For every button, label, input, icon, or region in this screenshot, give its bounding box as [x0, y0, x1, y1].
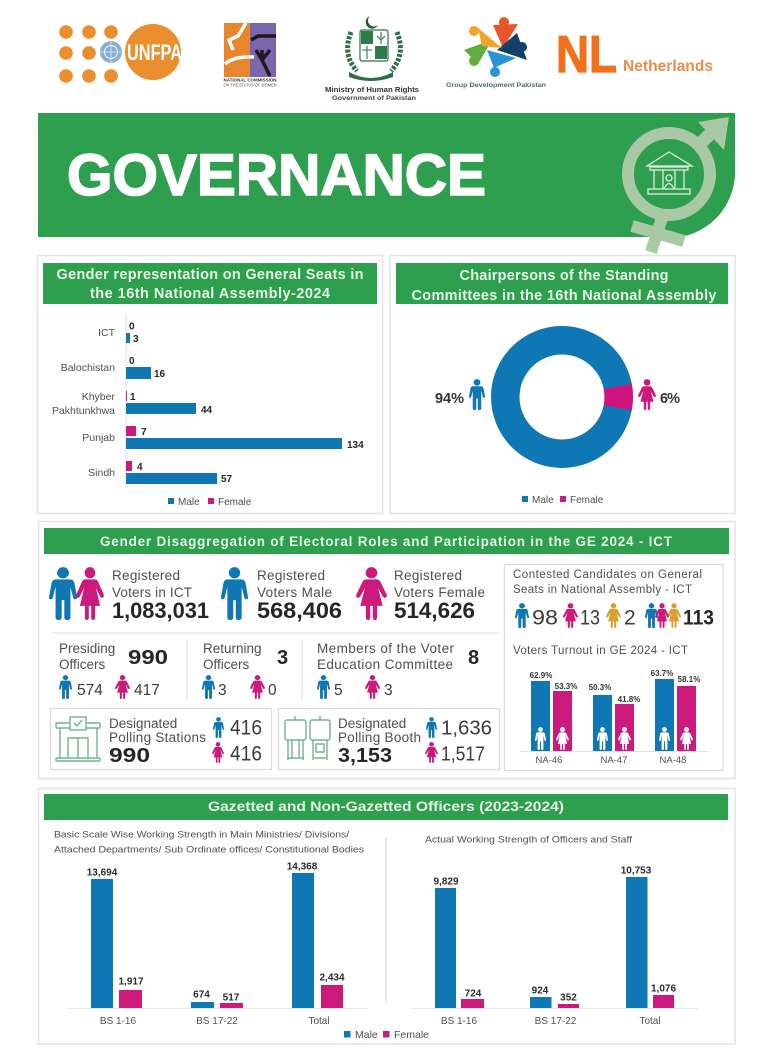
bar chart: basic scale working strength: BS 1-16: [100, 1016, 137, 1027]
icon: gender symbol with parliament building: [628, 117, 729, 252]
stat: presiding officers: Officers: [59, 657, 106, 672]
legend: [168, 497, 252, 508]
stat: candidates by gender: [515, 603, 714, 630]
heading: [44, 794, 728, 820]
bar chart: seats by province: 57: [221, 474, 233, 485]
stat: presiding officers: 990: [128, 647, 168, 669]
heading: Gender representation on General Seats in: [56, 267, 364, 283]
text: right chart title: Actual Working Strength of Officers and Staff: [425, 834, 632, 846]
stat: registered voters in ICT: [49, 567, 209, 623]
bar chart: seats by province: Balochistan: [61, 362, 115, 374]
bar chart: voter turnout: NA-48: [660, 755, 686, 766]
bar chart: actual working strength: 352: [560, 992, 577, 1004]
icon: polling booths: [285, 716, 330, 760]
card: designated polling stations: 416: [230, 742, 262, 766]
bar chart: voter turnout: 53.3%: [555, 682, 577, 691]
bar chart: voter turnout: 58.1%: [678, 675, 700, 684]
logo: National Commission on the Status of Women: [224, 23, 277, 88]
bar chart: voter turnout: [520, 669, 708, 766]
card: designated polling stations: 990: [109, 745, 150, 767]
stat: registered voters in ICT: 1,083,031: [112, 598, 209, 623]
stat: registered voters female: [356, 567, 485, 623]
legend: [522, 495, 604, 506]
bar chart: seats by province: [52, 313, 364, 487]
stat: returning officers: 0: [268, 682, 277, 699]
stat: returning officers: 3: [218, 682, 227, 699]
bar chart: basic scale working strength: 674: [193, 990, 210, 1000]
bar chart: actual working strength: 724: [465, 988, 482, 1000]
callout: male share: 94%: [435, 391, 464, 407]
bar chart: seats by province: 1: [130, 392, 136, 403]
stat: voter education committee: 5: [334, 682, 343, 699]
panel: gender representation on general seats: [38, 256, 382, 514]
stat: voter education committee: 3: [384, 682, 393, 699]
bar chart: voter turnout: 41.8%: [618, 695, 640, 704]
logo: National Commission on the Status of Women: NATIONAL COMMISSION: [224, 78, 277, 84]
heading: [44, 528, 729, 554]
bar chart: basic scale working strength: 517: [223, 992, 240, 1004]
stat: voter education committee: Education Committee: [317, 657, 453, 672]
logo: Group Development Pakistan: [446, 17, 546, 89]
title: GOVERNANCE: [67, 143, 486, 208]
stat: returning officers: [202, 641, 288, 699]
stat: returning officers: Returning: [203, 641, 262, 656]
bar chart: actual working strength: 9,829: [433, 876, 459, 888]
bar chart: basic scale working strength: 1,917: [118, 976, 144, 988]
bar chart: seats by province: 7: [141, 427, 147, 438]
legend: Female: [218, 497, 252, 508]
logo: Ministry of Human Rights: Ministry of Human Rights: [325, 85, 419, 94]
stat: returning officers: Officers: [203, 657, 250, 672]
bar chart: actual working strength: Total: [639, 1016, 661, 1027]
card: designated polling stations: Polling Stations: [109, 730, 206, 745]
stat: candidates by gender: 98: [532, 606, 558, 630]
stat: presiding officers: 574: [77, 682, 103, 699]
text: contested candidates: Contested Candidates on General: [513, 569, 702, 581]
bar chart: actual working strength: 10,753: [621, 866, 652, 876]
bar chart: basic scale working strength: 13,694: [87, 868, 118, 878]
card: contested candidates and voter turnout: [504, 564, 723, 770]
stat: registered voters male: Registered: [257, 568, 325, 583]
card: designated polling booth: [278, 708, 500, 770]
stat: registered voters in ICT: Registered: [112, 568, 180, 583]
bar chart: actual working strength: BS 17-22: [535, 1016, 577, 1027]
logo: UNFPA: [59, 24, 182, 83]
heading: Gender Disaggregation of Electoral Roles and Participation in the GE 2024 - ICT: [100, 534, 673, 549]
callout: female share: 6%: [660, 391, 680, 407]
text: voters turnout heading: Voters Turnout in GE 2024 - ICT: [513, 645, 688, 657]
legend: Male: [532, 495, 554, 506]
bar chart: voter turnout: NA-46: [536, 755, 562, 766]
legend: Female: [394, 1029, 429, 1041]
bar chart: basic scale working strength: 2,434: [319, 972, 345, 984]
stat: registered voters female: Voters Female: [394, 585, 485, 600]
bar chart: actual working strength: 924: [532, 986, 549, 996]
stat: registered voters female: 514,626: [394, 598, 475, 623]
legend: Female: [570, 495, 604, 506]
bar chart: seats by province: ICT: [98, 327, 116, 339]
bar chart: voter turnout: 50.3%: [589, 683, 611, 692]
card: designated polling booth: 1,636: [441, 718, 492, 740]
stat: candidates by gender: 113: [683, 606, 714, 630]
logo: Netherlands: [556, 26, 713, 84]
stat: registered voters male: [221, 567, 342, 623]
stat: voter education committee: 8: [468, 647, 479, 669]
text: left chart title: Basic Scale Wise Working Strength in Main Ministries/ Divisions/: [54, 830, 349, 840]
heading: the 16th National Assembly-2024: [90, 286, 330, 302]
bar chart: voter turnout: 63.7%: [651, 669, 673, 678]
heading: Chairpersons of the Standing: [460, 268, 668, 284]
bar chart: basic scale working strength: 14,368: [287, 862, 318, 872]
stat: presiding officers: [59, 641, 168, 699]
bar chart: seats by province: Pakhtunkhwa: [52, 405, 115, 417]
callout: female share: [638, 379, 680, 410]
logo: Group Development Pakistan: Group Development Pakistan: [446, 82, 546, 89]
bar chart: voter turnout: 62.9%: [530, 671, 552, 680]
bar chart: basic scale working strength: [68, 862, 368, 1027]
logo: UNFPA: UNFPA: [127, 40, 182, 65]
bar chart: basic scale working strength: Total: [308, 1016, 330, 1027]
text: left chart title: [54, 830, 364, 856]
card: designated polling booth: 1,517: [441, 744, 485, 766]
text: contested candidates: Seats in National Assembly - ICT: [513, 584, 692, 596]
bar chart: seats by province: 3: [133, 334, 139, 345]
heading: Committees in the 16th National Assembly: [412, 288, 716, 304]
bar chart: seats by province: Sindh: [88, 467, 115, 479]
panel: chairpersons of the standing committees: [390, 256, 735, 514]
bar chart: seats by province: 0: [129, 356, 135, 367]
logo: Netherlands: Netherlands: [623, 58, 713, 75]
card: designated polling stations: [50, 708, 272, 770]
bar chart: basic scale working strength: BS 17-22: [196, 1016, 238, 1027]
card: designated polling stations: Designated: [109, 716, 177, 731]
bar chart: seats by province: Khyber: [82, 391, 115, 403]
bar chart: seats by province: 134: [347, 440, 364, 451]
logo: Netherlands: NL: [556, 26, 617, 84]
bar chart: seats by province: 44: [201, 405, 213, 416]
stat: candidates by gender: 13: [580, 606, 600, 630]
donut chart: [505, 340, 633, 454]
bar chart: seats by province: 4: [137, 462, 143, 473]
bar chart: seats by province: 16: [154, 369, 166, 380]
stat: presiding officers: 417: [134, 682, 160, 699]
bar chart: actual working strength: [412, 866, 698, 1027]
heading: Gazetted and Non-Gazetted Officers (2023-2024): [208, 798, 564, 814]
card: designated polling booth: Polling Booth: [338, 730, 421, 745]
stat: registered voters in ICT: Voters in ICT: [112, 585, 192, 600]
logo: Ministry of Human Rights: [325, 16, 419, 102]
bar chart: voter turnout: NA-47: [601, 755, 627, 766]
bar chart: actual working strength: 1,076: [651, 984, 676, 994]
legend: Male: [355, 1029, 378, 1041]
stat: presiding officers: Presiding: [59, 641, 115, 656]
card: designated polling booth: Designated: [338, 716, 406, 731]
stat: registered voters male: 568,406: [257, 598, 342, 623]
text: left chart title: Attached Departments/ Sub Ordinate offices/ Constitutional Bodies: [54, 844, 364, 856]
stat: returning officers: 3: [277, 647, 288, 669]
panel: gazetted and non-gazetted officers: [38, 788, 735, 1044]
logo: Ministry of Human Rights: Government of Pakistan: [332, 95, 416, 102]
stat: candidates by gender: 2: [624, 606, 636, 630]
callout: male share: [435, 379, 485, 410]
heading: [396, 263, 728, 304]
panel: electoral roles and participation: [38, 522, 735, 778]
stat: voter education committee: Members of the Voter: [317, 641, 454, 656]
card: designated polling booth: 3,153: [338, 745, 392, 767]
banner: Governance: [38, 113, 735, 252]
text: contested candidates: [513, 569, 702, 596]
stat: registered voters female: Registered: [394, 568, 462, 583]
card: designated polling stations: 416: [230, 716, 262, 740]
bar chart: actual working strength: BS 1-16: [441, 1016, 478, 1027]
heading: [43, 263, 377, 304]
icon: polling station: [56, 717, 100, 761]
stat: registered voters male: Voters Male: [257, 585, 332, 600]
stat: voter education committee: [317, 641, 479, 699]
legend: Male: [178, 497, 200, 508]
bar chart: seats by province: Punjab: [82, 432, 115, 444]
logo: National Commission on the Status of Women: ON THE STATUS OF WOMEN: [224, 82, 276, 88]
legend: [344, 1029, 429, 1041]
bar chart: seats by province: 0: [129, 322, 135, 332]
